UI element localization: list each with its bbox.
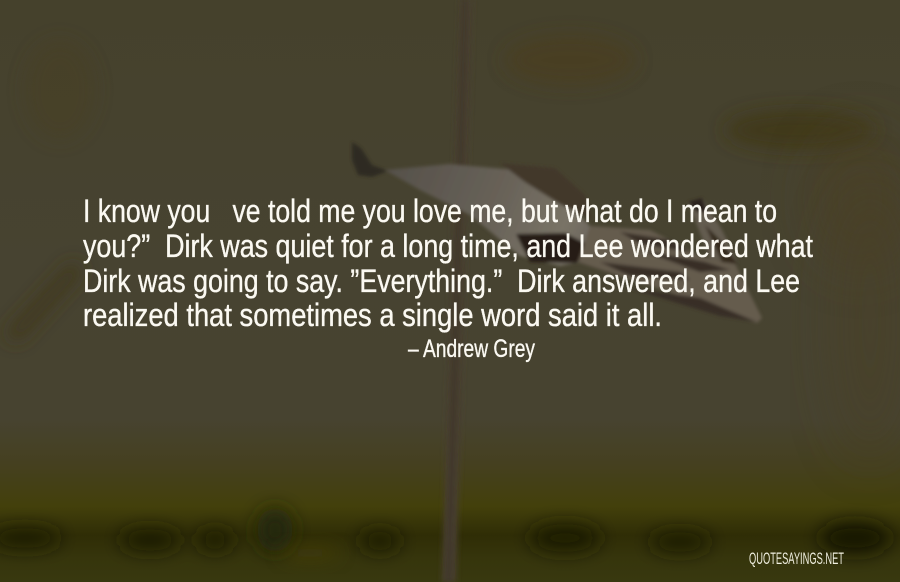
bushes bbox=[0, 508, 890, 554]
quote text bbox=[83, 193, 813, 333]
quote text: I know you ve told me you love me, but what do I mean to bbox=[83, 193, 777, 229]
bird tail bbox=[352, 142, 388, 177]
quote text: realized that sometimes a single word said it all. bbox=[83, 297, 662, 333]
bird body bbox=[385, 164, 600, 266]
bird underside bbox=[516, 233, 602, 263]
bird in flight bbox=[352, 142, 762, 323]
bird far wing tip bbox=[688, 198, 738, 264]
attribution: – Andrew Grey bbox=[408, 335, 535, 363]
bird right wing bbox=[578, 226, 762, 323]
bird upper wing bbox=[500, 163, 593, 220]
bird wing stripes bbox=[600, 232, 757, 322]
